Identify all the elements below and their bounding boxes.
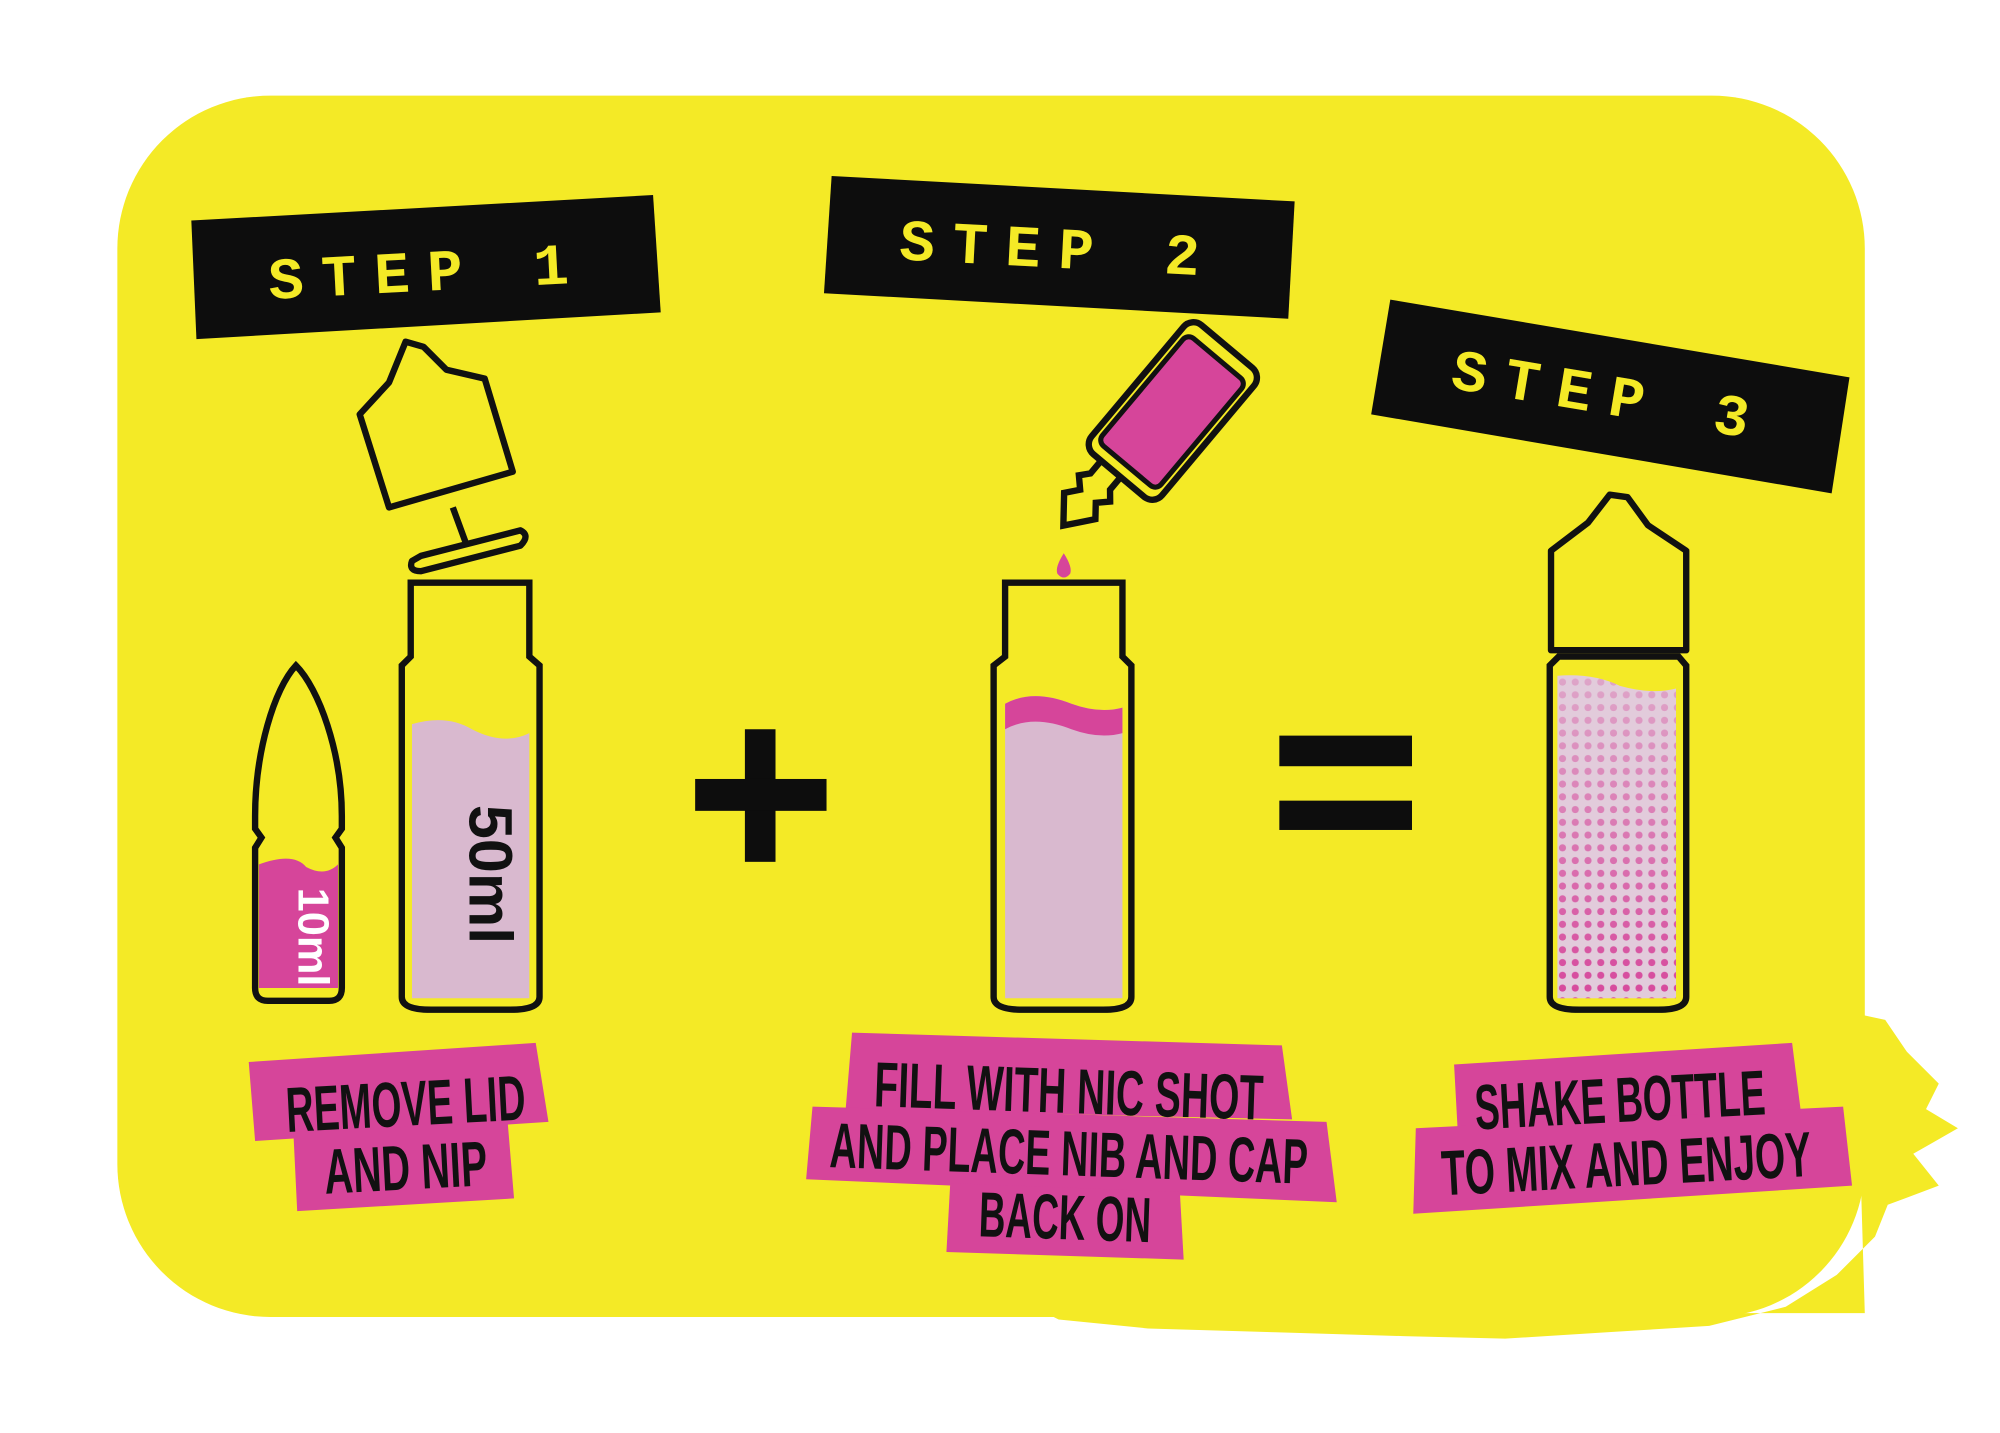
icon: step 3 bottle (1550, 495, 1686, 1010)
label: remove lid and nip: AND NIP (322, 1127, 489, 1208)
icon: 50ml bottle: 50ml (456, 805, 524, 944)
label: shake bottle (1413, 1043, 1852, 1214)
label: shake bottle: SHAKE BOTTLE (1473, 1056, 1767, 1143)
step 2 banner: STEP 2 (898, 210, 1219, 294)
icon: 50ml bottle (402, 583, 540, 1010)
step 3 banner (1371, 300, 1849, 493)
label: fill with nic shot (806, 1033, 1337, 1260)
label: fill with nic shot: FILL WITH NIC SHOT (873, 1048, 1265, 1134)
label: fill with nic shot: AND PLACE NIB AND CAP (829, 1109, 1309, 1198)
icon: 10ml bottle: 10ml (288, 888, 336, 986)
label: remove lid and nip (249, 1043, 548, 1211)
icon: drop (1057, 553, 1071, 578)
label: remove lid and nip: REMOVE LID (284, 1062, 527, 1146)
icon: dropper nic shot (1036, 317, 1262, 562)
label: fill with nic shot: BACK ON (978, 1178, 1152, 1256)
step 2 banner (824, 176, 1295, 319)
icon: lid and nib (360, 342, 526, 571)
panel: yellow background (117, 96, 1958, 1339)
step 3 banner: STEP 3 (1447, 340, 1772, 458)
icon: 10ml bottle (255, 666, 342, 1001)
icon: plus (695, 729, 827, 862)
icon: equals (1279, 736, 1412, 830)
step 1 banner (191, 195, 661, 339)
step 1 banner: STEP 1 (267, 233, 588, 317)
icon: step 2 bottle (994, 583, 1131, 1010)
